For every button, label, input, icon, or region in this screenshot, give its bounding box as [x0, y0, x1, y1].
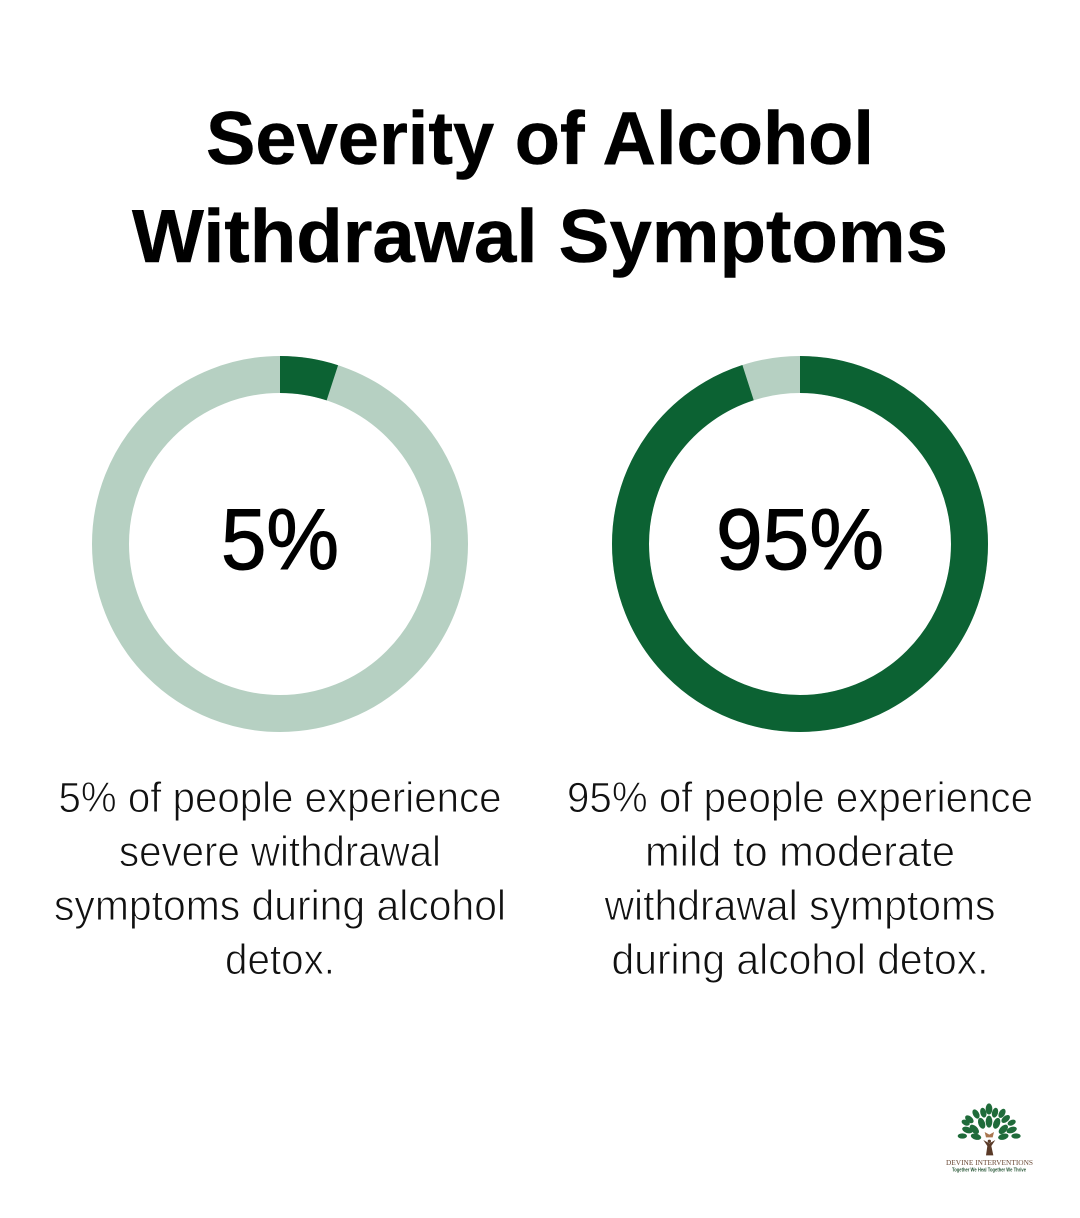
text block: mild to moderate symptoms description: 95% of people experience [567, 774, 1033, 822]
value: 95%: 95% [716, 492, 884, 588]
text block: mild to moderate symptoms description [567, 774, 1033, 984]
logo name: DEVINE INTERVENTIONS [946, 1158, 1033, 1167]
donut chart: 5% severe [110, 374, 450, 714]
text block: severe symptoms description: symptoms during alcohol [54, 882, 506, 930]
text block: severe symptoms description: detox. [225, 936, 335, 984]
text block: mild to moderate symptoms description: withdrawal symptoms [604, 882, 996, 930]
icon: tree [958, 1103, 1021, 1155]
logo tagline: Together We Heal Together We Thrive [952, 1168, 1026, 1174]
title [132, 96, 948, 278]
title: Severity of Alcohol [206, 96, 874, 180]
text block: severe symptoms description [54, 774, 506, 984]
logo: Devine Interventions [946, 1103, 1033, 1174]
text block: mild to moderate symptoms description: during alcohol detox. [612, 936, 988, 984]
text block: severe symptoms description: 5% of people experience [58, 774, 502, 822]
title: Withdrawal Symptoms [132, 194, 948, 278]
donut chart: 95% mild to moderate [630, 374, 970, 714]
text block: severe symptoms description: severe withdrawal [119, 828, 441, 876]
value: 5%: 5% [221, 492, 339, 588]
text block: mild to moderate symptoms description: mild to moderate [645, 828, 955, 876]
